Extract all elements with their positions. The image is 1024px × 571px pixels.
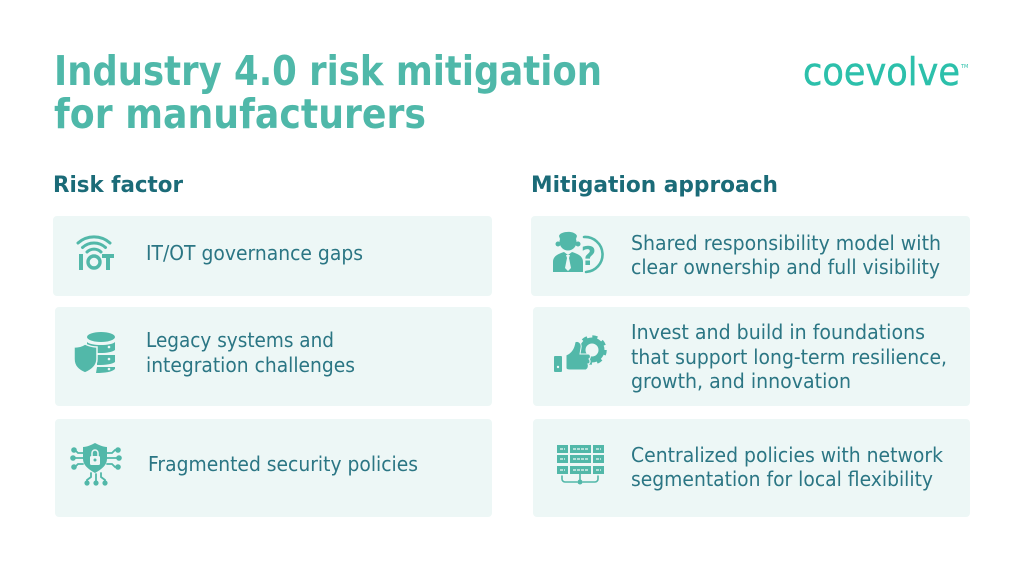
- heading: mitigation approach: Mitigation approach: [531, 172, 778, 198]
- panel: shared responsibility: [531, 216, 970, 296]
- icon: support agent with question mark: ?: [581, 242, 596, 272]
- title: Industry 4.0 risk mitigation: [54, 47, 602, 95]
- panel: fragmented security policies: [55, 419, 492, 517]
- text: Centralized policies with network: [631, 443, 943, 467]
- panel: centralized policies: [533, 419, 970, 517]
- text: IT/OT governance gaps: [146, 241, 363, 265]
- icon: network server grid: [557, 445, 604, 484]
- text: [631, 320, 947, 393]
- text: [631, 231, 941, 279]
- icon: shield and database: [74, 332, 115, 373]
- icon: circuit shield lock: [70, 443, 122, 486]
- panel: IT/OT governance gaps: [53, 216, 492, 296]
- text: clear ownership and full visibility: [631, 255, 940, 279]
- text: [631, 443, 943, 491]
- panel: invest and build: [533, 307, 970, 406]
- icon: support agent with question mark: [553, 232, 603, 272]
- text: Invest and build in foundations: [631, 320, 925, 344]
- logo: coevolve: coevolve: [803, 50, 960, 94]
- text: [146, 328, 355, 377]
- text: growth, and innovation: [631, 369, 851, 393]
- heading: risk factor: Risk factor: [53, 172, 184, 198]
- title: [54, 47, 602, 138]
- text: Shared responsibility model with: [631, 231, 941, 255]
- logo: coevolve: TM: [960, 64, 968, 70]
- title: for manufacturers: [54, 90, 426, 138]
- text: that support long-term resilience,: [631, 345, 947, 369]
- icon: IoT wifi: [78, 237, 114, 270]
- text: Fragmented security policies: [148, 452, 418, 476]
- text: integration challenges: [146, 353, 355, 377]
- text: segmentation for local flexibility: [631, 467, 933, 491]
- panel: legacy systems: [55, 307, 492, 406]
- icon: thumbs up with gear: [554, 337, 605, 372]
- text: Legacy systems and: [146, 328, 334, 352]
